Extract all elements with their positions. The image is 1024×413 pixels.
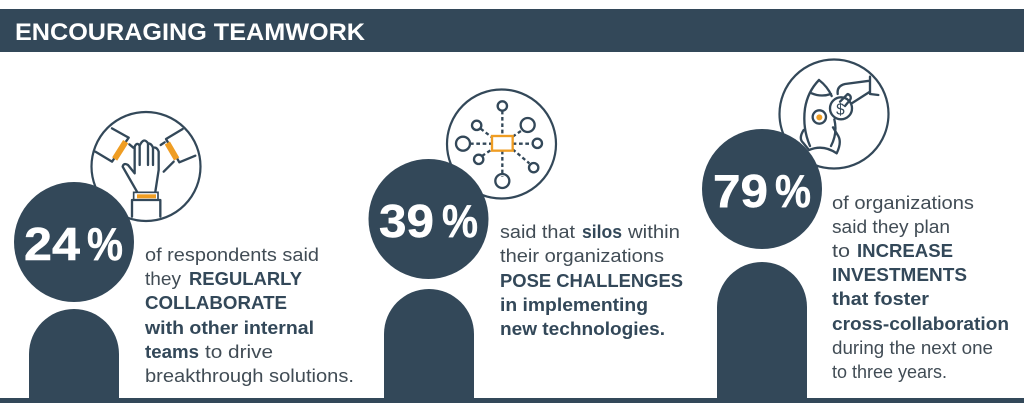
bottom rule <box>0 398 1024 403</box>
figure: head and body <box>14 182 134 398</box>
text block: 24 percent description: teams <box>145 342 199 362</box>
text block: 79 percent description: to three years. <box>832 362 947 382</box>
stat: 24% <box>24 218 123 270</box>
panel: 24 percent <box>14 112 354 398</box>
text block: 79 percent description: of organizations <box>832 193 974 213</box>
text block: 24 percent description: breakthrough solutions. <box>145 366 354 386</box>
figure: head and body <box>702 129 822 398</box>
text block: 39 percent description: new technologies. <box>500 319 665 339</box>
text block: 39 percent description <box>500 222 683 339</box>
text block: 24 percent description: REGULARLY <box>189 269 302 289</box>
title: ENCOURAGING TEAMWORK <box>15 19 366 46</box>
stat: 24%: 24 <box>24 218 80 270</box>
stat: 39%: % <box>442 195 478 247</box>
stat: 79%: 79 <box>713 165 768 217</box>
header band <box>0 9 1024 52</box>
stat: 39%: 39 <box>379 195 434 247</box>
text block: 39 percent description: their organizations <box>500 246 664 266</box>
text block: 24 percent description: with other internal <box>144 318 314 338</box>
icon: joined hands <box>92 112 200 221</box>
text block: 24 percent description: they <box>145 269 181 289</box>
text block: 79 percent description: said they plan <box>832 217 950 237</box>
text block: 79 percent description: that foster <box>832 289 929 309</box>
stat: 39% <box>379 195 478 247</box>
text block: 39 percent description: POSE CHALLENGES <box>500 271 683 291</box>
icon: rocket and coin <box>780 60 888 168</box>
text block: 79 percent description: to <box>832 241 850 261</box>
panel: 79 percent <box>702 60 1009 398</box>
figure: head and body <box>368 159 488 398</box>
icon: network <box>447 90 556 198</box>
text block: 39 percent description: within <box>627 222 680 242</box>
panel: 39 percent <box>368 90 683 398</box>
stat: 79%: % <box>775 165 811 217</box>
text block: 24 percent description: to drive <box>205 342 273 362</box>
text block: 39 percent description: said that <box>500 222 575 242</box>
stat: 24%: % <box>87 218 123 270</box>
text block: 24 percent description <box>144 245 354 386</box>
text block: 24 percent description: COLLABORATE <box>145 293 287 313</box>
text block: 39 percent description: silos <box>582 222 622 242</box>
stat: 79% <box>713 165 811 217</box>
text block: 24 percent description: of respondents said <box>145 245 319 265</box>
text block: 39 percent description: in implementing <box>500 295 648 315</box>
text block: 79 percent description: during the next one <box>832 338 993 358</box>
text block: 79 percent description: INVESTMENTS <box>832 265 967 285</box>
text block: 79 percent description <box>832 193 1009 382</box>
icon: rocket and coin: $ <box>836 101 845 118</box>
text block: 79 percent description: cross-collaboration <box>832 314 1009 334</box>
text block: 79 percent description: INCREASE <box>857 241 953 261</box>
